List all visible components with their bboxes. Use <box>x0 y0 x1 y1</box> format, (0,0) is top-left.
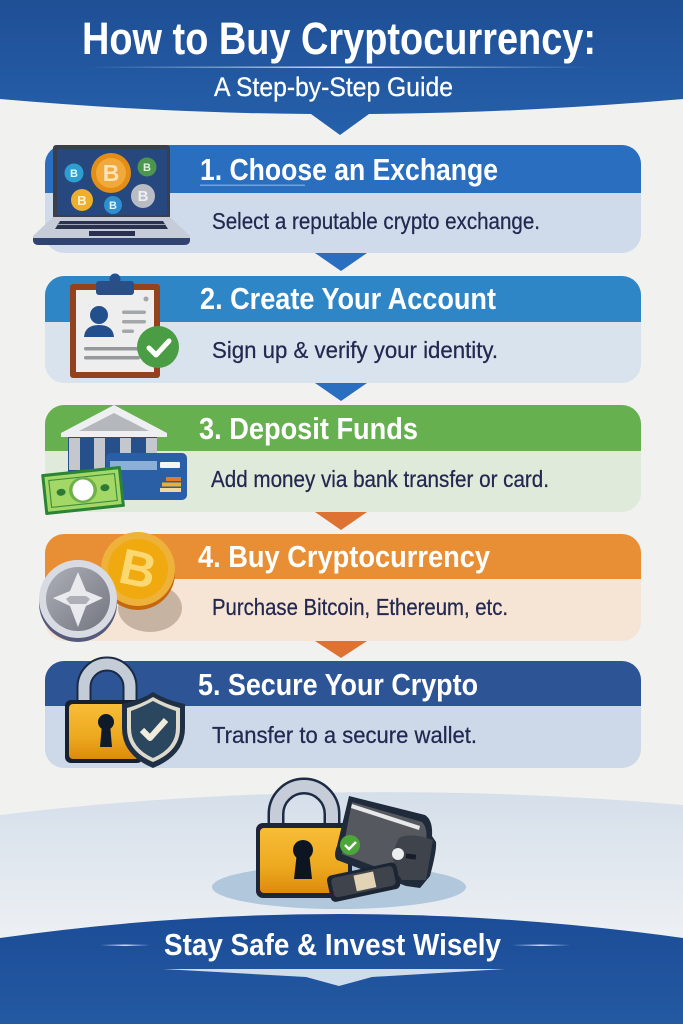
step 5 text: Transfer to a secure wallet. <box>212 722 477 748</box>
icon: laptop with coins: B <box>138 188 149 205</box>
icon: padlock and shield <box>65 664 185 768</box>
icon: padlock and wallet <box>212 786 466 909</box>
header banner <box>0 0 683 135</box>
step 3 heading: 3. Deposit Funds <box>199 411 418 446</box>
title: How to Buy Cryptocurrency: <box>82 13 596 64</box>
icon: bitcoin and ethereum coins <box>39 532 182 642</box>
icon: laptop with coins <box>33 145 190 245</box>
footer banner <box>0 914 683 1024</box>
icon: clipboard with profile and check <box>70 274 179 378</box>
step 5 heading: 5. Secure Your Crypto <box>198 667 478 702</box>
icon: laptop with coins: B <box>109 200 117 212</box>
step 4 text: Purchase Bitcoin, Ethereum, etc. <box>212 594 508 620</box>
step 2 heading: 2. Create Your Account <box>200 281 496 316</box>
footer slogan: Stay Safe & Invest Wisely <box>164 927 502 962</box>
arrow: step 2 to 3 <box>315 383 367 401</box>
step 3 text: Add money via bank transfer or card. <box>211 466 549 492</box>
icon: laptop with coins: B <box>70 168 78 180</box>
step 4 heading: 4. Buy Cryptocurrency <box>198 539 491 574</box>
panel: step 1 <box>45 145 641 253</box>
panel: step 2 <box>45 276 641 383</box>
step 2 text: Sign up & verify your identity. <box>212 337 498 363</box>
icon: laptop with coins: B <box>143 162 151 174</box>
icon: bitcoin and ethereum coins: B <box>115 538 161 600</box>
footer pennant <box>163 969 505 986</box>
subtitle: A Step-by-Step Guide <box>214 72 453 102</box>
step 1 heading: 1. Choose an Exchange <box>200 152 498 187</box>
arrow: step 3 to 4 <box>315 512 367 530</box>
panel: step 3 <box>45 405 641 512</box>
arrow: step 1 to 2 <box>315 253 367 271</box>
panel: step 5 <box>45 661 641 768</box>
icon: bank, card and cash <box>41 405 187 515</box>
step 1 text: Select a reputable crypto exchange. <box>212 208 540 234</box>
footer light panel <box>0 792 683 945</box>
arrow: step 4 to 5 <box>315 641 367 658</box>
icon: laptop with coins: B <box>103 160 119 186</box>
panel: step 4 <box>45 534 641 641</box>
icon: laptop with coins: B <box>77 193 87 208</box>
